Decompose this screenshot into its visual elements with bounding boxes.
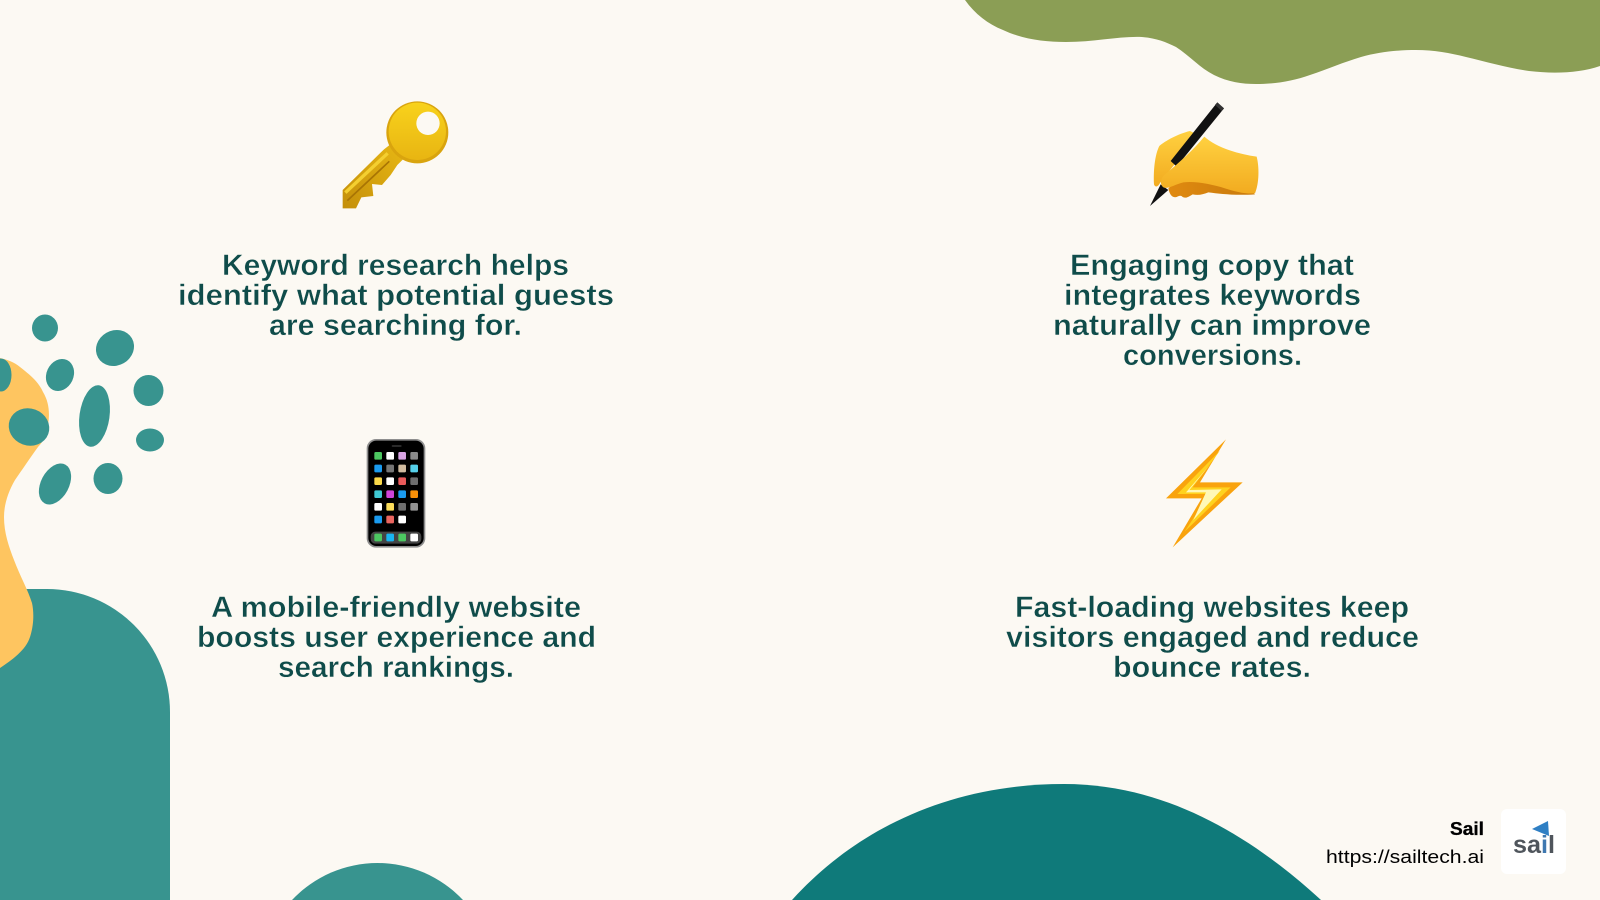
logo: sail: sail (1513, 831, 1555, 859)
text: fast-loading websites (1006, 591, 1419, 684)
decoration: large dark teal semicircle bottom (792, 784, 1321, 900)
icon: writing hand (1150, 102, 1258, 206)
text: mobile-friendly website: A mobile-friendly website (211, 591, 581, 624)
text: keyword research: Keyword research helps (222, 249, 569, 282)
text: mobile-friendly website: search rankings. (278, 651, 514, 684)
text: mobile-friendly website: boosts user experience and (197, 621, 596, 654)
text: fast-loading websites: bounce rates. (1113, 651, 1311, 684)
logo: sail (1501, 809, 1566, 874)
text: fast-loading websites: visitors engaged and reduce (1006, 621, 1419, 654)
brand name and url: https://sailtech.ai (1326, 846, 1484, 867)
text: keyword research (178, 249, 614, 342)
decoration: teal dots cluster (0, 314, 164, 510)
text: engaging copy (1053, 249, 1371, 372)
decoration: teal arch left (0, 589, 170, 900)
decoration: small teal semicircle bottom (292, 863, 463, 900)
decoration: yellow blob left (0, 358, 49, 668)
text: fast-loading websites: Fast-loading websites keep (1015, 591, 1409, 624)
text: engaging copy: naturally can improve (1053, 309, 1371, 342)
text: keyword research: are searching for. (269, 309, 522, 342)
text: mobile-friendly website (197, 591, 596, 684)
icon: lightning bolt (1166, 439, 1243, 547)
text: engaging copy: conversions. (1123, 339, 1302, 372)
text: engaging copy: Engaging copy that (1070, 249, 1354, 282)
brand name and url: Sail (1450, 819, 1484, 839)
icon: key (343, 101, 448, 208)
text: engaging copy: integrates keywords (1064, 279, 1361, 312)
icon: mobile phone (367, 439, 425, 548)
brand name and url (1326, 819, 1484, 867)
text: keyword research: identify what potential guests (178, 279, 614, 312)
decoration: green wave top right (965, 0, 1600, 84)
